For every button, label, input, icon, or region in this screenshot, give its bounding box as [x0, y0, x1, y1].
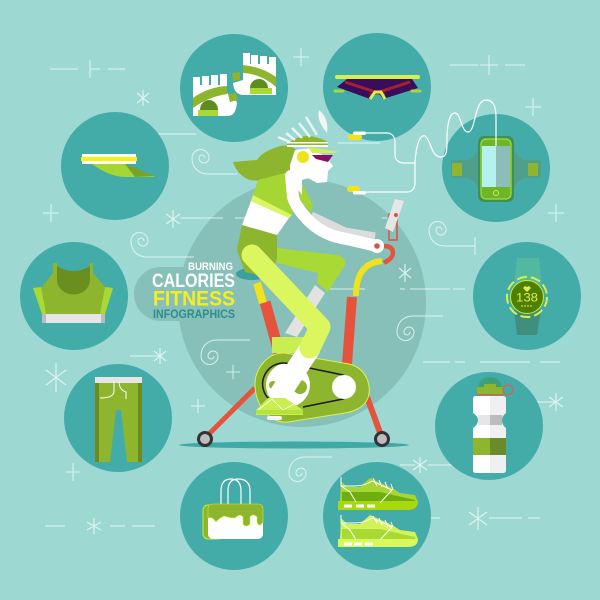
- hand: [370, 239, 384, 253]
- icon: left glove: [193, 74, 238, 116]
- wheels: [198, 432, 388, 446]
- near shoe: [256, 398, 303, 415]
- earphone cable: [347, 100, 496, 194]
- chain guard: [255, 353, 369, 422]
- chest strap: [296, 172, 313, 213]
- panel: sunglasses: [323, 33, 431, 141]
- head: [290, 148, 333, 195]
- icon: armband phone: [451, 136, 541, 202]
- torso: [237, 172, 295, 278]
- near leg: [252, 255, 320, 400]
- icon: top shoe: [338, 477, 418, 510]
- earphone: [297, 151, 309, 163]
- icon: sunglasses: [335, 75, 420, 99]
- bike frame: [205, 246, 393, 438]
- panel: phone armband: [442, 114, 550, 222]
- icon: bottle: [473, 377, 513, 473]
- icon: right glove: [232, 53, 276, 95]
- heading: infographics: INFOGRAPHICS: [153, 307, 235, 321]
- title text block: [152, 261, 235, 321]
- far leg: [272, 248, 345, 353]
- icon: bag: [203, 479, 263, 539]
- panel: heart rate watch: [473, 242, 581, 350]
- saddle: [236, 268, 268, 280]
- near arm: [291, 176, 377, 246]
- heading: burning: BURNING: [188, 261, 233, 273]
- panel: sports bra: [20, 242, 128, 350]
- panel: gloves: [180, 34, 288, 142]
- heart glyph: [523, 286, 531, 292]
- watch reading: 138: [516, 290, 538, 304]
- title backdrop blob: [134, 267, 264, 321]
- visor and sunglasses: [308, 147, 340, 162]
- panel: gym bag: [180, 462, 288, 570]
- headband with feathers: [278, 110, 328, 147]
- handlebar phone: [385, 199, 404, 240]
- hair: [233, 146, 298, 181]
- panel: visor: [61, 112, 169, 220]
- bike ground shadow: [179, 442, 409, 448]
- far arm: [311, 216, 375, 237]
- central backdrop circle: [178, 179, 426, 427]
- icon: visor: [81, 154, 155, 177]
- illustration: cyclist on exercise bike: [198, 110, 404, 446]
- panel: leggings: [64, 364, 172, 472]
- icon: leggings: [95, 377, 142, 462]
- heading: calories: CALORIES: [152, 270, 235, 292]
- panel: water bottle: [435, 372, 543, 480]
- icon: bottom shoe: [338, 515, 418, 547]
- icon: sports top: [33, 263, 113, 323]
- panel: running shoes: [323, 462, 431, 570]
- heading: fitness: FITNESS: [153, 288, 235, 310]
